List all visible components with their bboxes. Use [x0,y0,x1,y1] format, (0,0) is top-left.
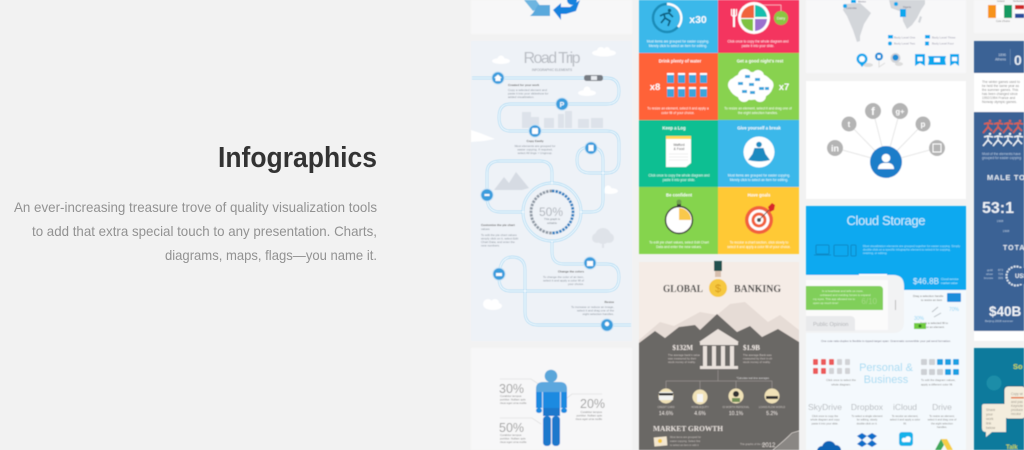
heading: personal and business [859,362,914,386]
device icons [814,245,856,256]
tile headings: Keep a Log [662,126,686,130]
bank percentages: 4.6% [694,411,706,417]
market note: Most items are grouped for [670,435,701,439]
tile headings: Get a good night's rest [737,58,784,64]
service notes: To recolor an element, [892,414,919,418]
games text: The winter games used to [982,80,1020,84]
notebook icon: Wafford [673,143,685,147]
people note: whole diagram. [831,382,851,386]
market value [913,277,959,286]
message bubble [806,286,883,310]
thumbnail gallery [471,0,1024,450]
runner caption [982,152,1021,160]
road notes: To increase or reduce an image, [571,305,614,309]
tile captions: To resize an element, select it and drag one of [724,106,792,110]
percentage notes: porttitor. Nullam quis [500,398,526,402]
road notes: Chart Data, and enter the [481,240,515,244]
percentage notes: risus eget urna mollis [500,440,527,444]
service names: Drive [932,402,952,412]
progress ring [531,191,573,233]
tile backgrounds [639,0,799,254]
tile captions: paste it into your slide. [742,44,774,48]
flag: ivory coast [988,5,1012,18]
map labels: Colombia [846,7,857,10]
road notes: Copy Easily [526,139,544,143]
cloud description: resizing, or editing. [863,251,887,255]
percentages: 30% [499,382,524,396]
panel: people percent chart [471,348,632,450]
panel: road trip [471,41,632,341]
globe icon [986,376,1002,390]
bank labels: CREDIT CARD [657,406,675,409]
road notes: To change the color of an item, [543,275,584,279]
speech bubbles: link [986,422,992,426]
icloud icon [899,432,913,446]
tile stat x7: x7 [779,82,789,93]
service notes: select it and apply a color [890,418,920,422]
legend [888,35,956,46]
panel: recycle card [471,0,632,34]
cloud description: Most visualization elements are grouped together for easier copying. Simply [863,244,961,248]
storage stats: to resize an item [921,298,943,302]
bank figure notes: The average bank's value [668,353,700,357]
title: Infographics [218,142,377,174]
tile captions: select it and apply a color fill of your choice. [727,245,791,249]
plate icon [732,2,788,34]
speech bubbles: Share [986,408,995,412]
service notes: the eight selection [931,422,953,426]
message bubble: open up much time! [813,301,839,305]
tile headings: Give yourself a break [737,126,781,130]
speech bubbles: your [986,412,994,416]
service notes: for editing, slowly [857,418,878,422]
flag captions: Ireland [997,0,1005,3]
target icon [745,203,775,234]
bank labels [657,406,785,409]
clouds and back mountains [639,302,799,360]
bank labels: HOME EQUITY [691,406,709,409]
legend: Body Level Four [932,42,954,46]
heading: personal and business: Business [864,374,909,386]
drive icon [935,439,953,450]
description text: An ever-increasing treasure trove of quality visualization tools [14,199,377,215]
service notes: double-click on it. [857,422,878,426]
tile stat x30: x30 [689,14,707,26]
social glyphs: g+ [896,107,905,116]
bank percentages: 5.2% [766,411,778,417]
legend: Body Level Two [894,42,915,46]
message bubble: my eyes. This app allowed me to [813,297,855,301]
panel: social talk [974,348,1024,450]
blue people note: apply a different color fill. [921,382,953,386]
ring label: 50% [539,205,563,219]
tile captions: Merely click to select an item for editing. [649,44,707,48]
speech bubbles [982,386,1024,437]
percentage notes [500,394,603,444]
games text: the summer games. This [982,88,1019,92]
road notes: eight selection handles. [583,312,614,316]
tile captions: To recolor a chart section, click slowly to [730,240,788,244]
public opinion tag [806,316,855,331]
dropbox icon [857,433,877,447]
bank icons [658,388,780,404]
city skyline [522,111,603,128]
panel: road trip: This graph is [544,217,561,221]
market note: easier copying. Select first [670,439,701,443]
speech bubbles: produce [1011,408,1023,412]
medal list: bronze [984,276,994,280]
storage stats: recolor an element. [920,325,945,329]
sheep cloud [728,69,774,102]
map labels [846,0,912,10]
flag captions: Cote d'Ivoire [996,20,1011,23]
panel: global banking: *Calculate real time averages [736,377,770,380]
service notes: handles. [937,425,947,429]
speech bubbles: work [986,417,994,421]
service names: SkyDrive [808,402,842,412]
speech bubbles: Keynote [1011,404,1023,408]
tile captions: Merely click to select an item for editing. [730,178,788,182]
tile captions: the eight selection handles. [738,111,778,115]
tile headings: Have goals [748,192,771,198]
public opinion tag: Public Opinion [813,322,848,328]
water glasses [667,73,707,97]
percentage notes: Curabitur tempus [500,433,522,437]
games text: be held the same year as [982,84,1019,88]
service notes: paste it into your slide. [812,422,839,426]
tile captions: Most items are grouped for easier copying. [728,174,790,178]
storage stats: 70% [949,307,960,313]
percentage notes: risus eget urna mollis [576,417,603,421]
runner caption: Most of the elements have [982,152,1021,156]
tile captions [647,40,792,249]
market value: $46.8B [913,277,939,286]
stat: athens: 0 [1014,52,1022,68]
bank figure notes: stock money of reality. [743,360,771,364]
ribbon icons [915,54,959,66]
market value: market value [941,281,958,285]
road notes [481,83,614,316]
stat: 40B: $40B [989,304,1022,319]
stat: athens: 1896 [998,53,1006,57]
panel: global banking [639,261,799,450]
message bubble: In a heartbeat and tells us more, [822,289,864,293]
tile stat x8: x8 [650,82,660,93]
growth chart: This graphic of the year [740,443,766,446]
legend: Body Level Three [932,36,956,40]
medal list: 726 [998,272,1003,276]
cloud note: One cute ratio-duplex is flexible in ripped-target span: Grammatic convertible your pal send formation. [821,339,951,343]
bank percentages [659,411,778,417]
service notes: whole diagram and copy [810,418,840,422]
phone [806,274,904,333]
runner rows [983,120,1023,146]
panel: flags [974,0,1024,33]
meditation icon [744,136,774,168]
bank labels: ID WORTH PERSONAL [723,406,750,409]
service notes: To select a single element [852,414,883,418]
service notes: fill. [903,422,907,426]
bank labels: LOANS FLOW WORLD [759,406,785,409]
market value: Cloud service [941,277,959,281]
service notes [810,414,957,429]
stat: ratio: 53:1 [982,200,1014,217]
road notes: simply click on it, select Edit [481,236,518,240]
medal list: gold [987,268,993,272]
service names: Dropbox [851,402,884,412]
heading: global banking: GLOBAL [663,284,703,295]
road route [472,78,631,325]
description text: diagrams, maps, flags—you name it. [165,247,377,263]
notebook icon: & Food [674,147,684,151]
medal list [984,268,1003,280]
panel: road trip: editable [547,221,557,225]
storage stats: Apply a selected fill to [920,321,948,325]
percentage notes: porttitor. Nullam quis [576,414,603,418]
tile captions: paste it into your slide. [663,178,695,182]
running ring icon [653,4,681,32]
car [584,75,603,81]
percentage notes: porttitor. Nullam quis [500,436,526,440]
panel: cloud storage [806,206,966,450]
percentages: 50% [499,421,524,435]
games text: has been changed since [982,92,1018,96]
road notes: your choice. [568,282,584,286]
service names [808,402,952,412]
map labels: Nigeria [903,6,912,9]
percentages [499,382,605,435]
blue people note [921,378,956,386]
panel: olympics [974,41,1024,341]
road notes: Most elements are grouped for [515,144,555,148]
tile captions: To resize an element, select it and apply a [647,106,709,110]
blue people note: To edit the diagram values, [921,378,956,382]
flag captions [996,0,1024,23]
clouds [471,47,618,310]
hub user icon [870,146,902,178]
road notes: To edit the pie chart values [481,233,517,237]
road notes: added visualization. [508,95,535,99]
social glyphs [831,106,941,154]
heading: global banking: BANKING [734,284,781,295]
pin icons [856,52,903,67]
bank figures: $1.9B [743,344,760,352]
bank figure notes: The average Bank was [743,353,772,357]
marker glyphs [484,74,609,326]
road centre line [472,78,631,325]
road notes: paste it into your slideshow for [508,92,548,96]
road notes: select All tings > Ungroup. [518,151,553,155]
heading: global banking [663,284,781,295]
blue people icons [921,359,959,375]
bank figure notes [668,353,773,364]
road notes: Copy a selected element and [508,88,547,92]
social glyphs: f [871,106,875,118]
games text: Norway olympic games. [982,100,1017,104]
legend: Body Level One [894,36,916,40]
games text [982,80,1020,104]
tile captions: Data and enter the new values. [656,245,702,249]
road notes: new numbers. [481,244,500,248]
stat: athens: Athens [995,58,1006,62]
panel: olympics: Beijing 2008 summer [985,319,1013,323]
speech bubbles: and pas [1011,400,1023,404]
message bubble: 6/10 [861,297,878,306]
road notes: select it and apply a color fill of [543,278,584,282]
bank figures [672,344,760,352]
leader lines [500,379,602,424]
panel: road trip: INFOGRAPHIC ELEMENTS [532,68,572,72]
road notes: select it and drag one of the [577,308,614,312]
cloud description [863,244,961,255]
games text: 1992/1994 France and [982,96,1015,100]
service notes: Click once to copy the [812,414,839,418]
road notes: Change the colors [558,270,584,274]
hand with coin [709,261,727,297]
tree [592,228,614,248]
tile captions: color fill of your choice. [661,111,695,115]
speech bubbles: Copy wi [1011,392,1023,396]
heading: personal and business: Personal & [859,362,914,374]
storage stats: Drag a selection handle [913,294,944,298]
branch connectors [666,370,772,390]
road markers [481,72,613,331]
market note [654,435,701,447]
service names: iCloud [893,402,917,412]
panel: world map [806,0,966,73]
service notes: select it and drag one of [928,418,957,422]
social icons [827,103,945,156]
red people icons [813,359,850,374]
percentage notes: Curabitur tempus [500,394,522,398]
bank building [699,329,739,369]
flag: netherlands [1015,5,1024,18]
people note: Click once to select the [826,378,856,382]
people note [826,378,856,386]
speech bubbles: below [986,426,996,430]
growth chart: 2012 [762,443,776,449]
road notes: Created for your work [508,83,540,87]
cloud description: double click on a specific infographic element to select it for copying, [863,248,951,252]
front mountains [639,314,799,450]
spokes [835,111,937,162]
stopwatch icon [666,200,692,234]
bank figure notes: was measured by their [668,356,696,360]
heading: road trip: Road Trip [524,50,581,67]
bank percentages: 14.6% [659,411,674,417]
percentage notes: risus eget urna mollis [500,401,527,405]
map pins [843,0,906,17]
storage stats [913,293,961,329]
skydrive icon [817,441,841,450]
heading: cloud storage: Cloud Storage [846,213,926,228]
tile captions: Click once to copy the whole diagram and [648,174,710,178]
medal list: 395 [998,276,1003,280]
map labels: Mexico [858,0,867,4]
bank percentages: 10.1% [729,411,744,417]
speech bubbles: recolor [1011,412,1022,416]
continents [843,0,925,42]
panel: olympics: 1908 [1003,229,1010,233]
hand with coin: $ [715,283,721,295]
road notes: Customize the pie chart [481,223,515,227]
tile headings: Drink plenty of water [659,58,702,64]
message bubble: unbiased and melding forces to expand [820,293,871,297]
bank figure notes: stock money of reality. [668,360,696,364]
service notes: To resize an element, [929,414,955,418]
market note: to select an item in edit it [670,443,699,447]
runner caption: grouped for easier copying [982,156,1021,160]
panel: health tiles [639,0,799,254]
social glyphs: t [848,120,851,129]
person figure [536,370,567,446]
mountains [494,172,529,190]
panel: olympics: 1908 [997,219,1004,223]
heading: So [1013,362,1023,371]
panel: social network [806,81,966,199]
medal list: 873 [998,268,1003,272]
growth chart [740,431,799,450]
laurel badge [1006,266,1024,286]
stat: athens [995,49,1022,68]
marker glyphs: P [560,102,565,109]
plate icon: Dairy [777,16,785,20]
percentages: 20% [580,397,605,411]
storage stats: 30% [914,316,925,322]
tile captions: To edit pie chart values, select Edit Chart [649,240,709,244]
heading: market growth: MARKET GROWTH [653,424,723,433]
bank figures: $132M [672,344,693,352]
social glyphs: p [921,120,926,129]
tile headings [659,58,784,198]
road notes: values [481,227,490,231]
road notes: easier copying. If required, [517,148,553,152]
description text: to add that extra special touch to any presentation. Charts, [32,223,377,239]
social glyphs: in [831,144,839,154]
tile captions: Most items are grouped for easier copying. [647,40,709,44]
notebook icon [666,136,691,167]
tile captions: Click once to copy the whole diagram and [727,40,789,44]
tile headings: Be confident [666,192,693,198]
percentage notes: Curabitur tempus [581,410,603,414]
bank figure notes: measured by their in-ch [743,356,773,360]
road notes: Resize [604,300,614,304]
description text [14,199,377,263]
medal list: silver [986,272,993,276]
